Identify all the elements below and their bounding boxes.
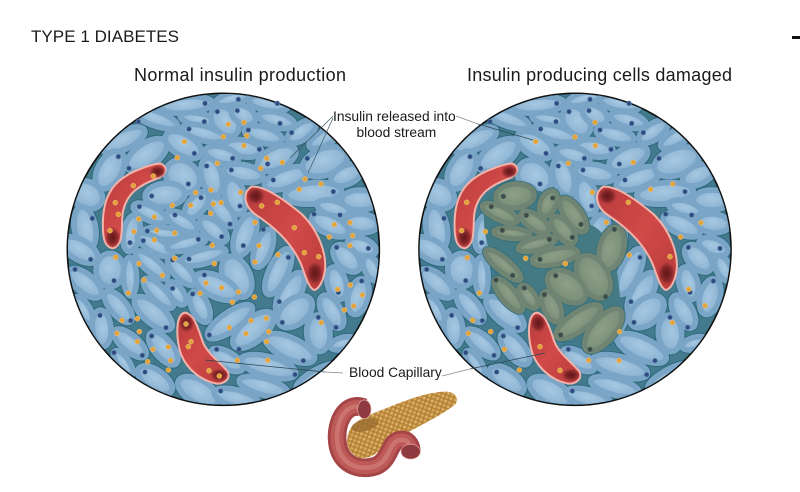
cell nuclei <box>424 97 722 393</box>
pancreas shadow patch <box>350 416 380 434</box>
duodenum tube <box>337 400 420 468</box>
blue cells <box>58 88 384 413</box>
label: insulin released into blood stream: blood stream <box>356 125 436 140</box>
insulin granules <box>107 120 365 378</box>
pancreas body <box>347 392 457 458</box>
leader lines: blood capillary <box>205 353 545 376</box>
cell nuclei <box>73 97 371 393</box>
damaged green cells <box>480 182 629 357</box>
panel: normal islet circle <box>58 88 384 413</box>
icon: pancreas illustration <box>337 392 457 468</box>
label: insulin released into blood stream: Insulin released into <box>333 109 456 124</box>
blood capillaries <box>455 163 677 384</box>
panel: damaged islet circle <box>409 88 736 413</box>
heading: insulin producing cells damaged: Insulin producing cells damaged <box>467 65 732 85</box>
heading: normal insulin production: Normal insulin production <box>134 65 346 85</box>
label: insulin released into blood stream <box>333 109 456 140</box>
label: blood capillary: Blood Capillary <box>349 365 442 380</box>
insulin granules <box>459 120 708 373</box>
blood capillaries <box>103 163 325 384</box>
top right dash mark <box>792 36 800 39</box>
title: TYPE 1 DIABETES <box>31 27 179 46</box>
blue cells <box>409 88 736 413</box>
leader lines: insulin released <box>290 116 533 173</box>
